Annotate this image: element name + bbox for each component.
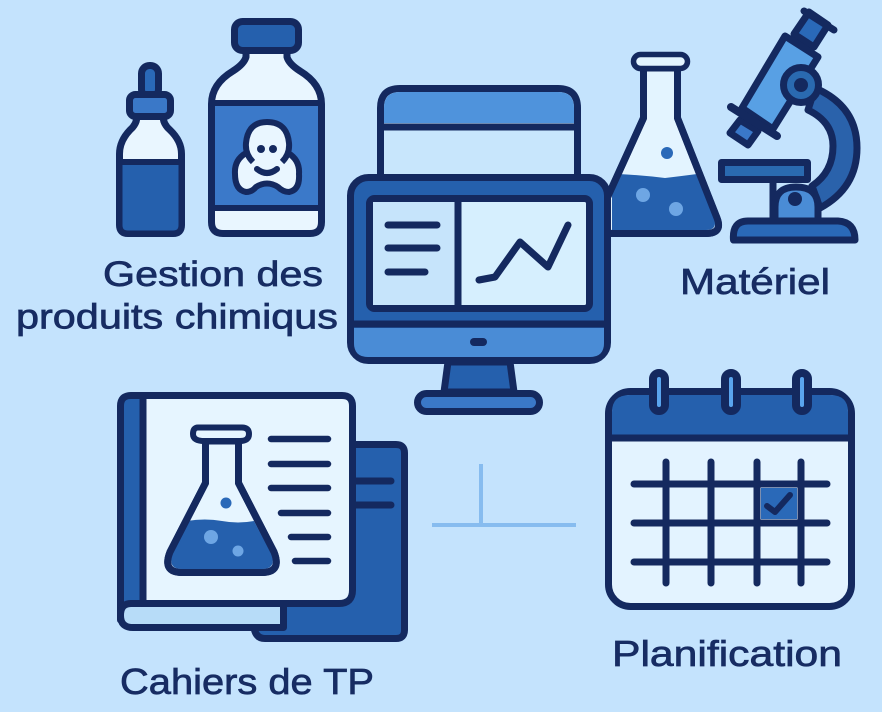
icon: erlenmeyer flask <box>601 54 719 234</box>
heading: lab notebooks: Cahiers de TP <box>120 661 374 702</box>
icon: calendar <box>608 373 852 606</box>
icon: poison bottle <box>212 22 322 234</box>
rear window <box>380 88 578 180</box>
icon: dropper bottle <box>120 66 182 234</box>
monitor body <box>350 178 608 360</box>
icon: skull and crossbones <box>235 122 299 192</box>
line chart <box>479 225 568 280</box>
connector lines <box>432 464 576 525</box>
heading: chemicals <box>16 255 338 336</box>
heading: chemicals: Gestion des <box>103 255 323 294</box>
heading: chemicals: produits chimiqus <box>16 298 338 336</box>
calendar rings <box>653 373 808 411</box>
icon: lab notebook <box>120 396 404 638</box>
heading: planning: Planification <box>612 633 842 674</box>
monitor stand <box>444 362 514 392</box>
icon: microscope <box>722 11 857 240</box>
back book <box>254 444 404 638</box>
notebook text lines <box>271 439 328 561</box>
calendar grid <box>634 462 827 583</box>
icon: checked day <box>761 488 797 519</box>
heading: equipment: Matériel <box>680 261 830 302</box>
icon: computer monitor <box>350 88 608 412</box>
